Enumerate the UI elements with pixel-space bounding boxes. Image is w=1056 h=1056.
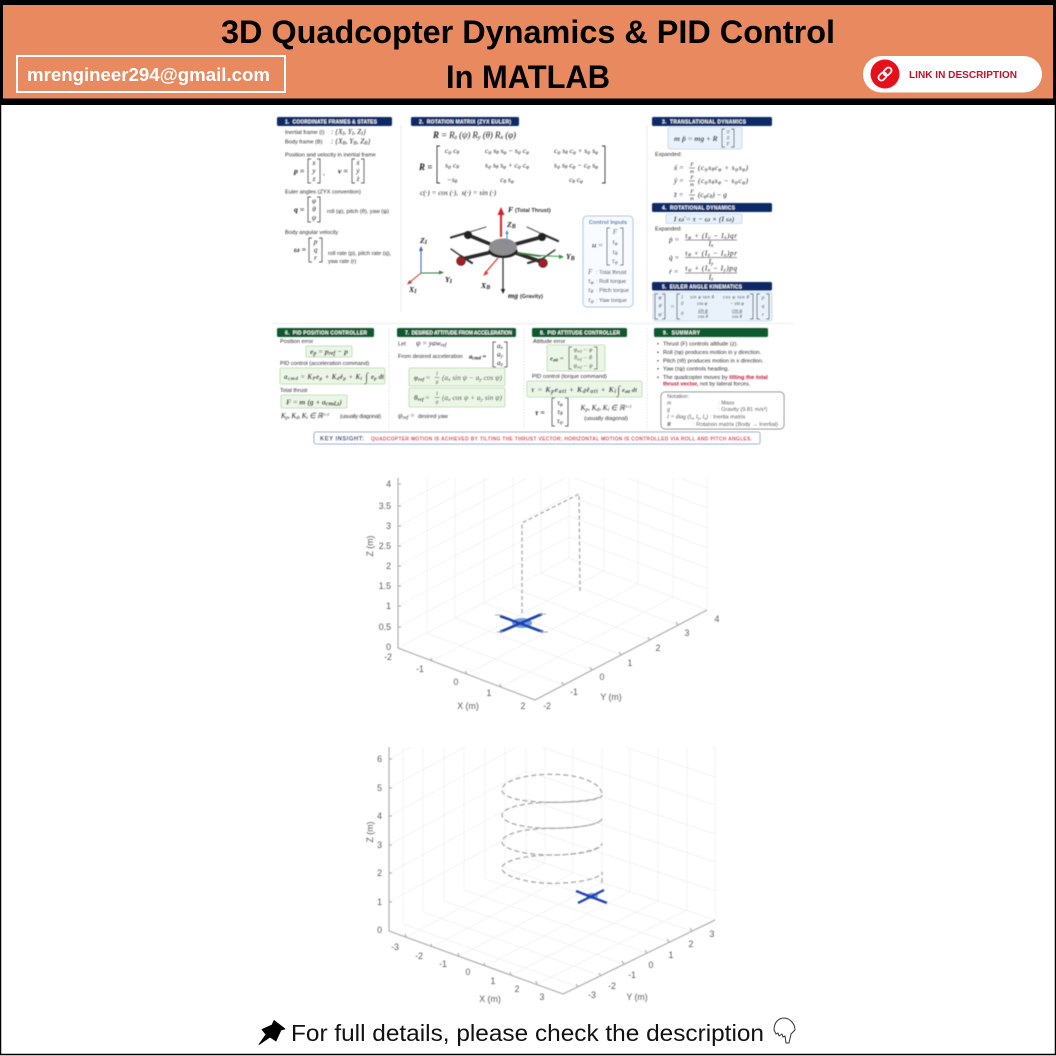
control inputs box: u = [592,240,603,250]
tick labels: 4 [386,479,391,489]
3D plot 1: square trajectory [366,478,720,712]
panel 1: coordinate frames and states: p = [293,166,305,176]
panel 5: euler angle kinematics: = [670,303,675,311]
panel 4: rotational dynamics: Iy [708,258,714,267]
notation box: : Gravity (9.81 m/s²) [718,407,768,413]
panel 1: coordinate frames and states: ẋ [355,159,360,167]
notation box: : Rotation matrix (Body → Inertial) [693,422,778,428]
tick labels: -3 [391,942,399,952]
panel 2: rotation matrix: R = [418,162,432,172]
panel 1: coordinate frames and states: ψ [312,214,317,222]
panel 6: PID position controller: Position error [280,339,313,345]
panel 9: summary: • [657,358,659,364]
panel 3: translational dynamics: (cψsθsφ − sψcφ) [698,177,749,186]
panel 9: summary: Roll (τφ) produces motion in y direction. [663,350,762,356]
panel 3: translational dynamics: m [690,169,694,175]
tick labels: 1 [628,658,633,668]
panel 9: summary: • [657,350,659,356]
notation box: R [666,422,671,428]
panel 5: euler angle kinematics: θ̇ [659,304,663,310]
panel 8: PID attitude controller: 8. PID ATTITUDE CONTROLLER [540,330,620,336]
tick labels: 4 [377,811,382,821]
panel 4: rotational dynamics: τψ + (Ix − Iy)pq [685,264,737,274]
axes [398,478,707,700]
equation: desired pitch: θref = [414,394,430,403]
axis labels [365,535,622,711]
control inputs box: τφ [612,238,618,247]
tick labels: -1 [416,664,424,674]
panel 6: PID position controller: Kp, Kd, Ki ∈ ℝ [281,412,323,421]
tick labels: 2 [521,701,526,711]
panel 2: rotation matrix: 2. ROTATION MATRIX (ZYX EULER) [419,120,511,126]
tick labels: 3 [386,521,391,531]
panel 9: summary: thrust vector, not by lateral forces. [663,382,751,388]
panel 5: euler angle kinematics: q [762,304,765,310]
tick labels: 0 [649,960,654,970]
3D plot 2: helix trajectory [366,746,716,1004]
panel 6: PID position controller: ∫ [364,370,369,384]
panel 6: PID position controller: (usually diagonal) [340,414,381,420]
control inputs box: τφ [588,277,594,286]
panel 2: rotation matrix: c(·) = cos (·), s(·) = sin (·) [420,189,497,197]
panel 1: coordinate frames and states: r [314,254,317,262]
panel 1: coordinate frames and states: yaw rate (r) [328,259,356,265]
panel 5: euler angle kinematics: cos φ [697,302,708,307]
panel 1: coordinate frames and states: y [311,167,316,175]
axis labels [365,821,648,1004]
panel 2: rotation matrix: cψ cθ [445,147,459,156]
equation: desired roll: (ax sin ψ − ay cos ψ) [442,374,503,383]
panel 8: PID attitude controller [527,328,642,426]
panel 8: PID attitude controller: Kp, Kd, Ki ∈ ℝ [581,404,625,413]
equation: desired roll: φref = [414,374,430,383]
panel 8: PID attitude controller: eatt = [550,356,564,364]
panel 5: euler angle kinematics: r [762,312,765,318]
tick labels: 2 [386,561,391,571]
panel 7: desired attitude from acceleration: ψ = yawref [416,340,448,349]
panel 1: coordinate frames and states: Body frame (B) [285,140,323,146]
axis labels: Y (m) [600,692,622,702]
panel 4: rotational dynamics: I ω̇ = τ − ω × (I ω) [673,214,735,224]
panel 5: euler angle kinematics: sin φ tan θ [690,296,715,300]
control inputs box: : Roll torque [596,279,626,285]
icon: pointing hand [774,1018,795,1043]
panel 8: PID attitude controller: θref − θ [574,356,592,362]
panel 7: desired attitude from acceleration: 7. DESIRED ATTITUDE FROM ACCELERATION [405,330,512,336]
panel 5: euler angle kinematics: cos φ [732,309,742,314]
equation: desired pitch: g [436,399,439,405]
quadcopter marker [495,614,548,632]
control inputs box [583,216,633,307]
panel 2: rotation matrix: cψ sθ cφ + sψ sφ [554,147,598,156]
tick labels: 3 [540,992,545,1002]
panel 6: PID position controller: ep = pref − p [310,347,348,357]
panel 3: translational dynamics: F [689,162,694,168]
panel 6: PID position controller: F = m (g + acmd,z) [286,398,342,408]
panel 7: desired attitude from acceleration [397,328,516,421]
panel 2: rotation matrix: cψ sθ sφ − sψ cφ [485,147,529,156]
tick labels: 0.5 [379,622,391,632]
panel 1: coordinate frames and states: ẏ [355,167,360,175]
equation: desired pitch: (ax cos ψ + ay sin ψ) [442,394,503,403]
panel 8: PID attitude controller: φref − φ [574,348,593,354]
panel 1: coordinate frames and states: 1. COORDINATE FRAMES & STATES [285,120,378,126]
panel 5: euler angle kinematics: − sin φ [730,302,744,307]
equation: desired roll [409,368,505,386]
inertial frame axes: YI [445,275,453,285]
panel 3: translational dynamics: F [689,175,694,181]
notation box: : Inertia matrix [710,414,746,420]
panel 2: rotation matrix: sψ sθ sφ + cψ cφ [485,162,529,171]
panel 5: euler angle kinematics: cos φ tan θ [723,296,750,300]
tick labels: -1 [439,959,447,969]
tick labels: 5 [377,783,382,793]
panel 1: coordinate frames and states: , [323,169,325,177]
force arrow: gravity: mg [508,291,518,300]
panel 9: summary: • [657,366,659,372]
panel 4: rotational dynamics [652,203,772,283]
control inputs box: : Yaw torque [596,298,627,304]
panel 7: desired attitude from acceleration: ax [497,342,504,351]
panel 6: PID position controller [277,328,385,421]
tick labels: -1 [628,970,636,980]
tick labels: 2 [656,643,661,653]
panel 1: coordinate frames and states: Euler angles (ZYX convention) [285,190,361,196]
axis arrow: Z body: ZB [506,220,516,230]
panel 4: rotational dynamics: Ix [708,240,714,249]
panel 2: rotation matrix: cθ cφ [569,176,583,185]
control inputs box: τθ [612,248,618,257]
control inputs box: F [612,228,618,236]
notation box: : Mass [718,400,735,406]
panel 2: rotation matrix: sψ sθ cφ − cψ sφ [554,162,598,171]
tick labels: 4 [715,614,720,624]
panel 9: summary: Yaw (τψ) controls heading. [663,366,730,372]
panel 8: PID attitude controller: τθ [557,408,563,417]
panel 8: PID attitude controller: τ = [535,408,545,417]
force arrow: total thrust [498,205,551,237]
key insight callout: QUADCOPTER MOTION IS ACHIEVED BY TILTING THE THRUST VECTOR; HORIZONTAL MOTION IS CONTROLLED VIA ROLL AND PITCH ANGLES. [371,436,753,442]
tick labels: 3 [685,628,690,638]
panel 1: coordinate frames and states: p [313,238,318,246]
panel 3: translational dynamics: Expanded: [655,152,682,158]
panel 8: PID attitude controller: eatt dt [622,387,637,395]
inertial frame axes: ZI [419,236,428,246]
notation box: Notation: [667,394,690,400]
panel 8: PID attitude controller: τφ [557,399,563,408]
panel 9: summary: Pitch (τθ) produces motion in x direction. [663,358,764,364]
panel 1: coordinate frames and states: Body angular velocity [285,230,338,236]
panel 1: coordinate frames and states: ż [356,175,360,183]
tick labels: 2 [377,868,382,878]
panel 1: coordinate frames and states: z [312,175,316,183]
tick labels: 0 [377,925,382,935]
panel 4: rotational dynamics: ṗ = [668,236,679,244]
tick labels: -2 [415,951,423,961]
panel 8: PID attitude controller: PID control (torque command) [532,374,607,380]
panel 5: euler angle kinematics: 5. EULER ANGLE KINEMATICS [662,284,743,290]
axis arrow: X body: XB [480,281,490,291]
axis labels: X (m) [479,994,501,1004]
control inputs box: : Pitch torque [596,288,629,294]
grid lines [402,748,716,986]
tick labels: 1 [669,950,674,960]
inertial frame axes: XI [408,285,417,295]
tick labels: 3.5 [379,501,391,511]
panel 2: rotation matrix [411,117,605,197]
panel 7: desired attitude from acceleration: az [497,359,504,368]
panel 5: euler angle kinematics: p [761,295,765,301]
panel 1: coordinate frames and states: ω = [294,245,307,254]
tick labels [379,479,720,711]
axis labels: Y (m) [626,992,648,1002]
control inputs box: : Total thrust [596,270,627,276]
tick labels: 3 [377,840,382,850]
link in description pill [863,56,1042,92]
equation: desired roll: g [436,379,439,385]
panel 4: rotational dynamics: τθ + (Iz − Ix)pr [685,250,737,259]
control inputs box: τθ [588,286,594,295]
email box: mrengineer294@gmail.com [27,64,270,85]
inertial frame axes [407,236,453,295]
panel 8: PID attitude controller: 3×3 [625,404,631,409]
drone arms and propellers [451,227,558,263]
panel 7: desired attitude from acceleration: From desired acceleration [398,354,463,360]
panel 3: translational dynamics: m p̈ = mg + R [674,134,718,143]
email box [17,56,285,92]
panel 5: euler angle kinematics: sin φ [698,309,708,314]
tick labels: 2.5 [379,541,391,551]
tick labels: -2 [384,652,392,662]
panel 4: rotational dynamics: q̇ = [669,254,679,262]
panel 1: coordinate frames and states: Inertial frame (I) [285,130,325,136]
tick labels: -2 [543,701,551,711]
axis arrow: Y body: YB [566,252,575,262]
notation box: g [667,407,670,413]
tick labels: -2 [608,981,616,991]
tick labels: 1 [487,688,492,698]
panel 1: coordinate frames and states: roll (φ), pitch (θ), yaw (ψ) [327,209,389,215]
panel 2: rotation matrix: sψ cθ [445,162,459,171]
flight path: dashed helix [502,774,602,883]
flight path: dashed trajectory [522,494,580,613]
grid lines [426,480,707,680]
panel 2: rotation matrix: R = Rz (ψ) Ry (θ) Rx (φ) [432,130,516,141]
header banner [0,0,1056,105]
panel 5: euler angle kinematics: φ̇ [658,295,664,301]
icon: pushpin [259,1020,285,1044]
tick labels: 2 [689,939,694,949]
panel dividers [401,125,647,312]
panel 1: coordinate frames and states [277,117,392,265]
axis labels: Z (m) [365,535,375,557]
panel 1: coordinate frames and states: v = [338,166,348,176]
force arrow: total thrust: F [508,205,514,214]
panel 3: translational dynamics [652,117,772,202]
panel 2: rotation matrix: −sθ [447,176,458,185]
key insight callout [314,432,760,444]
panel 1: coordinate frames and states: roll rate (p), pitch rate (q), [328,251,392,257]
equation: desired pitch: 1 [436,391,439,397]
panel 3: translational dynamics: 0 [727,136,730,142]
panel 9: summary: • [657,342,659,348]
panel 5: euler angle kinematics: 1 [681,296,683,300]
tick labels: 0 [386,642,391,652]
panel 3: translational dynamics: ÿ = [673,177,684,185]
panel 8: PID attitude controller: Attitude error [533,339,565,345]
panel 3: translational dynamics: 3. TRANSLATIONAL DYNAMICS [662,120,747,126]
panel 5: euler angle kinematics: 0 [681,312,684,317]
panel 4: rotational dynamics: ṙ = [669,268,679,276]
panel 9: summary: • [657,375,659,381]
force arrow: gravity: (Gravity) [520,294,543,300]
control inputs box: τψ [588,296,595,305]
panel 3: translational dynamics: (cφcθ) − g [698,191,727,200]
control inputs box: Control Inputs [589,220,627,226]
equation: desired pitch [409,388,505,407]
title line 1: 3D Quadcopter Dynamics & PID Control [221,14,835,50]
panel 8: PID attitude controller: τ = Kpeatt + Kdėatt + Ki [531,385,616,395]
control inputs box: F [587,268,593,276]
tick labels: -3 [588,990,596,1000]
panel 1: coordinate frames and states: q = [294,205,305,214]
panel 1: coordinate frames and states: : {XI, YI, ZI} [331,128,366,137]
panel 5: euler angle kinematics: cos θ [732,315,743,320]
axis labels: Z (m) [365,821,375,843]
panel 7: desired attitude from acceleration: Let [398,342,406,348]
footer note [259,1018,795,1046]
quadcopter marker [576,890,607,903]
tick labels: 0 [454,677,459,687]
force arrow: gravity [501,257,543,300]
panel 6: PID position controller: ep dt [371,373,385,382]
panel 5: euler angle kinematics: 0 [681,302,684,307]
link in description pill: LINK IN DESCRIPTION [909,69,1017,81]
key insight callout: KEY INSIGHT: [320,436,364,442]
panel 6: PID position controller: acmd = KPep + Kdėp + Ki [284,373,363,382]
panel 8: PID attitude controller: τψ [557,417,564,426]
panel 5: euler angle kinematics: ψ̇ [658,312,664,318]
panel 1: coordinate frames and states: φ [312,197,316,205]
tick labels: 2 [515,984,520,994]
tick labels: 0 [600,672,605,682]
panel 1: coordinate frames and states: θ [312,206,316,214]
panel 9: summary: 9. SUMMARY [663,330,701,336]
tick labels: 3 [710,929,715,939]
panel 9: summary [654,328,784,429]
panel 4: rotational dynamics: Iz [708,274,714,283]
panel 1: coordinate frames and states: x [311,159,316,167]
panel 1: coordinate frames and states: q [314,246,318,254]
force arrow: total thrust: (Total Thrust) [515,208,551,214]
panel 9: summary: The quadcopter moves by tilting the total [663,375,768,381]
panel 3: translational dynamics: F [689,189,694,195]
panel 3: translational dynamics: 0 [727,130,730,136]
panel 7: desired attitude from acceleration: desired yaw [418,414,449,420]
notation box: I = diag (Ix, Iy, Iz) [666,414,708,421]
panel 1: coordinate frames and states: Position and velocity in inertial frame [285,152,376,158]
panel 7: desired attitude from acceleration: acmd = [469,354,486,362]
panel 5: euler angle kinematics [652,282,772,321]
panel 6: PID position controller: 3×3 [323,412,329,417]
panel 4: rotational dynamics: 4. ROTATIONAL DYNAMICS [662,206,736,212]
panel 7: desired attitude from acceleration: ay [497,350,504,360]
panel 4: rotational dynamics: Expanded: [655,226,682,232]
panel 1: coordinate frames and states: : {XB, YB, ZB} [331,138,371,147]
panel 5: euler angle kinematics: cos θ [698,315,709,320]
panel 6: PID position controller: PID control (acceleration command) [280,361,369,367]
tick labels: 1 [386,601,391,611]
tick labels: 1.5 [379,581,391,591]
panel 3: translational dynamics: F [725,142,730,148]
panel 9: summary: Thrust (F) controls altitude (z). [663,342,738,348]
notation box [661,392,784,429]
panel 3: translational dynamics: ẍ = [673,164,684,172]
tick labels: 1 [491,976,496,986]
notation box: m [667,400,672,406]
tick labels: -1 [570,687,578,697]
tick labels: 0 [466,967,471,977]
panel 7: desired attitude from acceleration: ψref = [398,412,415,421]
tick labels: 6 [377,754,382,764]
panel 3: translational dynamics: z̈ = [673,191,684,199]
panel 6: PID position controller: 6. PID POSITION CONTROLLER [285,330,367,336]
footer text: For full details, please check the description [291,1020,764,1046]
panel 3: translational dynamics: m [690,196,694,202]
axis labels: X (m) [457,701,479,711]
title line 2: In MATLAB [446,59,610,95]
control inputs box: τψ [612,257,619,266]
panel 2: rotation matrix: cθ sφ [500,176,514,185]
panel 4: rotational dynamics: τφ + (Iy − Iz)qr [685,232,737,241]
axes [389,747,715,994]
quadcopter equations infographic [272,117,794,444]
panel 8: PID attitude controller: ∫ [616,383,621,397]
panel 8: PID attitude controller: ψref − ψ [573,364,593,370]
equation: desired roll: 1 [436,371,439,377]
tick labels: 1 [377,897,382,907]
panel 8: PID attitude controller: (usually diagonal) [584,416,628,422]
panel 6: PID position controller: Total thrust [280,388,308,394]
tick labels [377,754,715,1002]
drone illustration with force arrows [451,205,575,300]
panel 3: translational dynamics: (cψsθcφ + sψsφ) [698,164,749,173]
panel 3: translational dynamics: m [690,182,694,188]
